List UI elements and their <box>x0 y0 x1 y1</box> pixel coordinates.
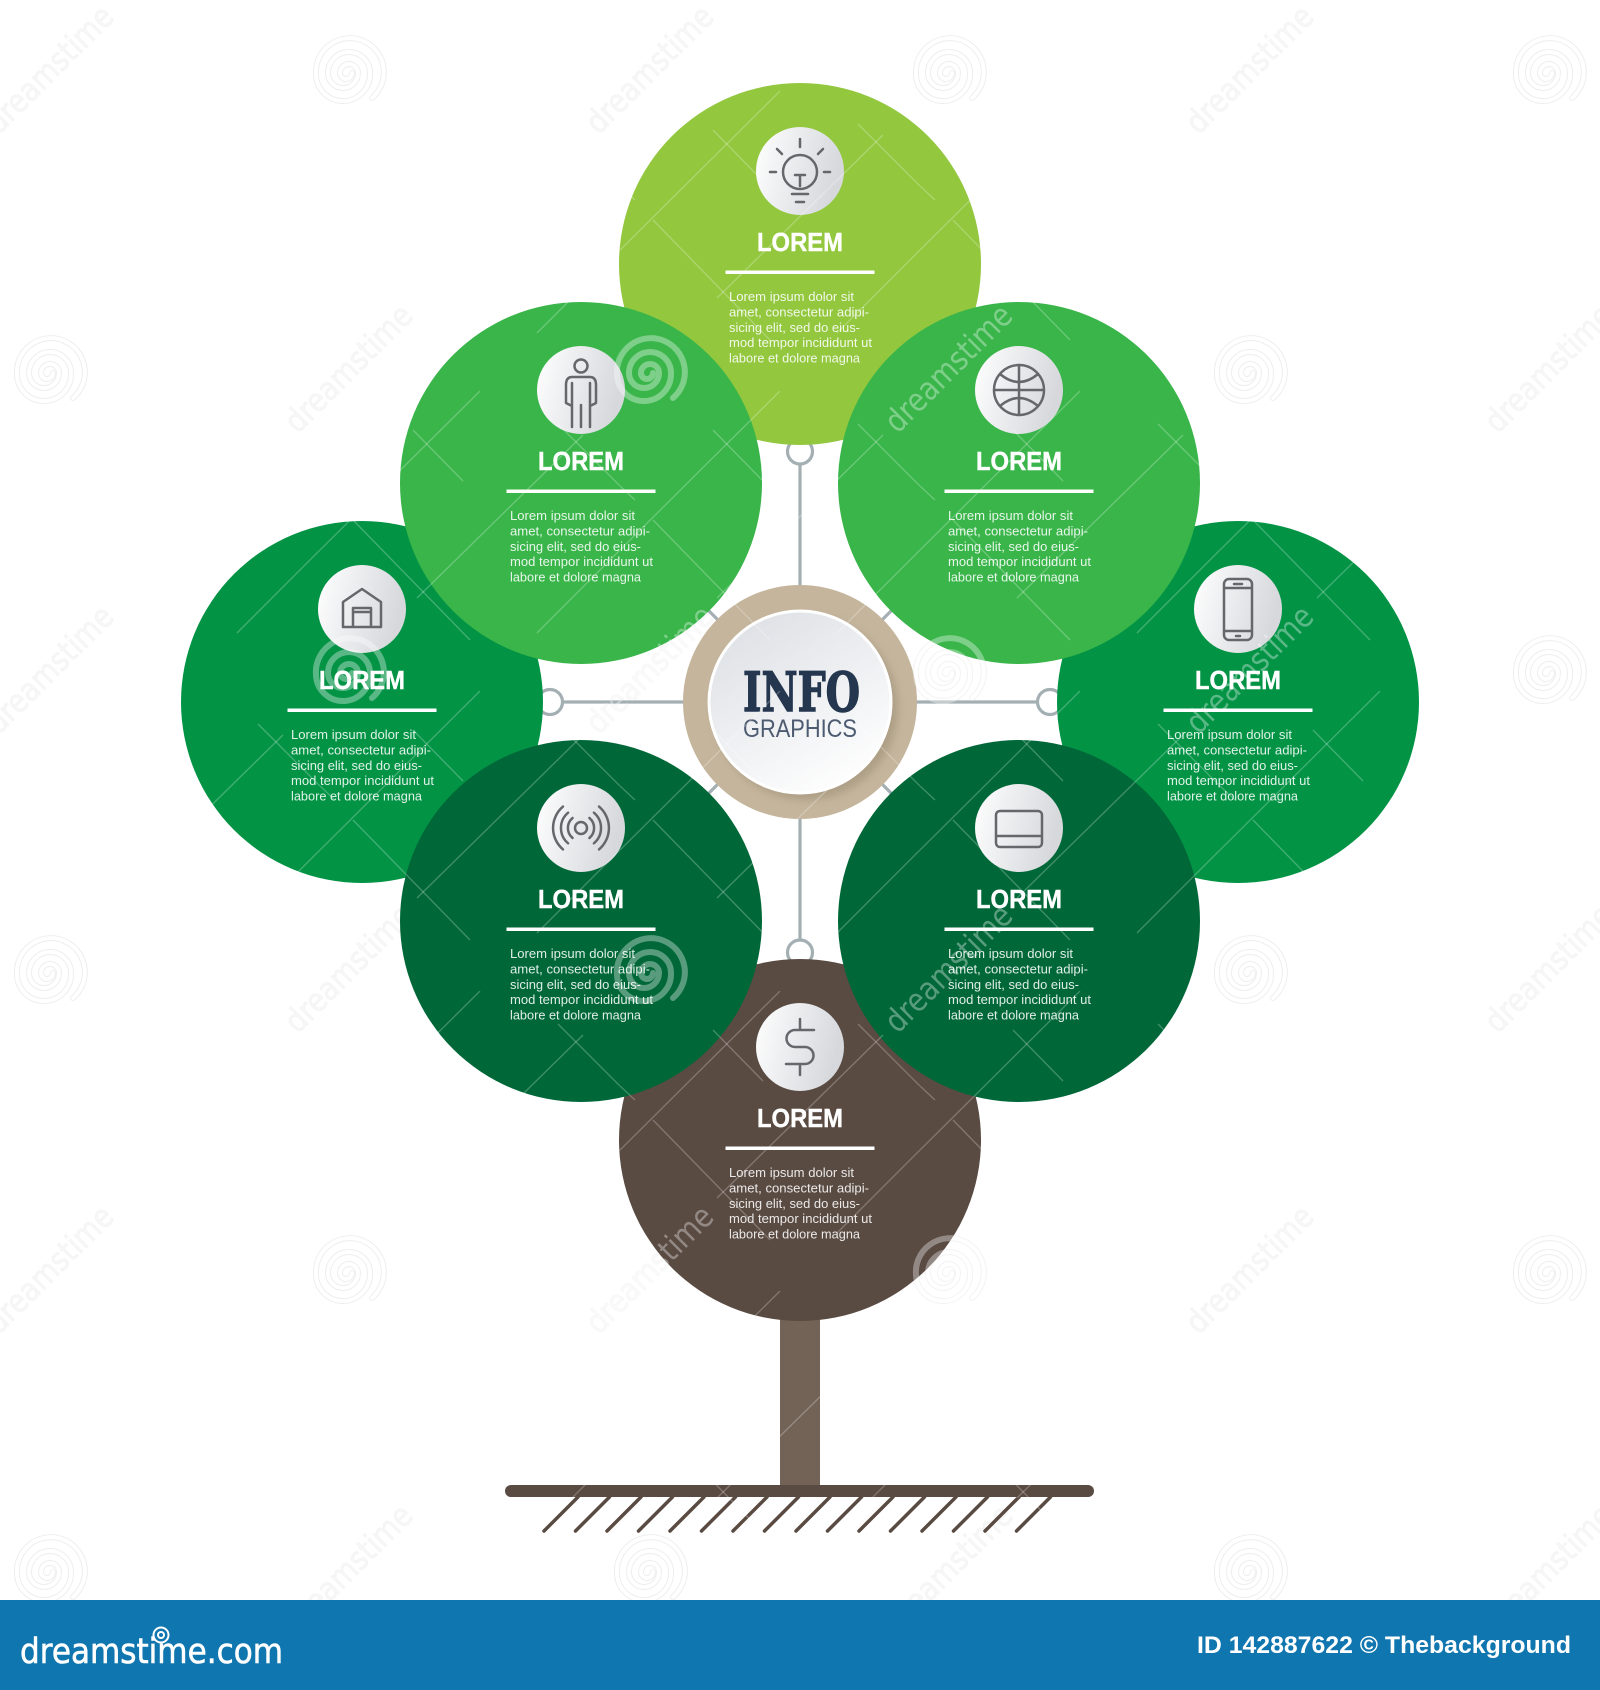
body text: sicing elit, sed do eius- <box>948 539 1079 554</box>
body text: mod tempor incididunt ut <box>510 554 653 569</box>
body text <box>1167 727 1310 804</box>
watermark: faint spirals and wordmarks on white: dreamstime <box>578 598 721 741</box>
watermark: faint spirals and wordmarks on white: dreamstime <box>277 897 420 1040</box>
body text: mod tempor incididunt ut <box>291 773 434 788</box>
panel: bottom circle, money <box>619 959 981 1321</box>
icon: smartphone <box>1194 565 1282 653</box>
body text: sicing elit, sed do eius- <box>510 539 641 554</box>
body text: Lorem ipsum dolor sit <box>510 946 635 961</box>
icon: house <box>318 565 406 653</box>
body text: amet, consectetur adipi- <box>948 524 1088 538</box>
ground line with hatching <box>505 1485 1094 1531</box>
panel: upper-right circle, basketball <box>838 302 1200 664</box>
divider <box>944 928 1094 931</box>
divider <box>506 490 656 493</box>
icon: laptop card <box>975 784 1063 872</box>
body text: labore et dolore magna <box>729 350 861 366</box>
panel: top circle, idea <box>619 83 981 445</box>
heading: LOREM <box>757 227 843 257</box>
panel: left circle, home <box>181 521 543 883</box>
watermark: faint spirals and wordmarks on white: dreamstime <box>277 1497 420 1640</box>
body text: labore et dolore magna <box>510 1008 642 1022</box>
watermark: faint spirals and wordmarks on white: dreamstime <box>578 1198 721 1341</box>
icon: basketball <box>975 346 1063 434</box>
body text: mod tempor incididunt ut <box>948 554 1091 569</box>
body text: Lorem ipsum dolor sit <box>729 1165 854 1180</box>
divider <box>288 708 436 712</box>
hub title: INFO <box>743 660 860 724</box>
tree trunk <box>780 1315 820 1490</box>
footer logo text: dreamstime.com <box>20 1632 283 1672</box>
body text <box>729 1165 872 1242</box>
body text: mod tempor incididunt ut <box>729 1211 872 1226</box>
body text <box>510 946 653 1022</box>
divider <box>726 1146 874 1150</box>
footer logo spiral <box>154 1628 168 1642</box>
panel: right circle, phone <box>1057 521 1419 883</box>
heading: LOREM <box>976 446 1062 476</box>
body text: Lorem ipsum dolor sit <box>291 727 416 742</box>
body text: amet, consectetur adipi- <box>510 962 650 976</box>
icon: dollar sign <box>756 1003 844 1091</box>
body text: amet, consectetur adipi- <box>729 1180 869 1196</box>
heading: LOREM <box>976 884 1062 914</box>
footer bar <box>0 1600 1600 1690</box>
center hub <box>683 585 917 819</box>
body text: mod tempor incididunt ut <box>510 992 653 1007</box>
divider <box>506 928 656 931</box>
body text: amet, consectetur adipi- <box>1167 742 1307 758</box>
watermark: faint spirals and wordmarks on white: dreamstime <box>877 1497 1020 1640</box>
body text: amet, consectetur adipi- <box>948 962 1088 976</box>
watermark: translucent spirals and wordmarks on the circles: dreamstime <box>578 1198 721 1341</box>
watermark: translucent spirals and wordmarks on the circles: dreamstime <box>578 598 721 741</box>
icon: person <box>537 346 625 434</box>
icon: wireless signal <box>537 784 625 872</box>
hub subtitle: GRAPHICS <box>743 715 857 743</box>
footer credit: ID 142887622 © Thebackground <box>1197 1632 1571 1659</box>
watermark: translucent spirals and wordmarks on the circles: dreamstime <box>877 897 1020 1040</box>
body text: sicing elit, sed do eius- <box>729 1196 860 1211</box>
body text: sicing elit, sed do eius- <box>510 977 641 992</box>
body text <box>948 508 1091 584</box>
body text: amet, consectetur adipi- <box>291 742 431 758</box>
heading: LOREM <box>757 1103 843 1133</box>
panel: lower-left circle, signal <box>400 740 762 1102</box>
divider <box>726 270 874 274</box>
watermark: translucent spirals and wordmarks on the circles <box>316 297 1321 1341</box>
body text <box>948 946 1091 1022</box>
connector lines and end rings <box>538 439 1062 965</box>
body text: Lorem ipsum dolor sit <box>948 508 1073 523</box>
body text: mod tempor incididunt ut <box>729 335 872 350</box>
body text: sicing elit, sed do eius- <box>729 320 860 335</box>
divider <box>1164 708 1312 712</box>
body text <box>510 508 653 584</box>
body text: labore et dolore magna <box>948 1008 1080 1022</box>
body text: mod tempor incididunt ut <box>1167 773 1310 788</box>
body text: sicing elit, sed do eius- <box>1167 758 1298 773</box>
heading: LOREM <box>319 665 405 695</box>
body text: labore et dolore magna <box>1167 788 1299 804</box>
heading: LOREM <box>1195 665 1281 695</box>
body text: labore et dolore magna <box>729 1226 861 1242</box>
body text: labore et dolore magna <box>510 570 642 584</box>
icon: light bulb <box>756 127 844 215</box>
body text: Lorem ipsum dolor sit <box>729 289 854 304</box>
panel: upper-left circle, person <box>400 302 762 664</box>
heading: LOREM <box>538 884 624 914</box>
body text: amet, consectetur adipi- <box>729 304 869 320</box>
body text: sicing elit, sed do eius- <box>291 758 422 773</box>
watermark: translucent spirals and wordmarks on the circles: dreamstime <box>1178 598 1321 741</box>
watermark: translucent spirals and wordmarks on the circles: dreamstime <box>877 297 1020 440</box>
watermark: faint spirals and wordmarks on white: dreamstime <box>277 297 420 440</box>
body text <box>729 289 872 366</box>
body text: labore et dolore magna <box>291 788 423 804</box>
body text: mod tempor incididunt ut <box>948 992 1091 1007</box>
body text: sicing elit, sed do eius- <box>948 977 1079 992</box>
body text: Lorem ipsum dolor sit <box>1167 727 1292 742</box>
body text: Lorem ipsum dolor sit <box>948 946 1073 961</box>
panel: lower-right circle, device <box>838 740 1200 1102</box>
body text: Lorem ipsum dolor sit <box>510 508 635 523</box>
divider <box>944 490 1094 493</box>
body text: amet, consectetur adipi- <box>510 524 650 538</box>
watermark: faint spirals and wordmarks on white: dreamstime <box>1178 1198 1321 1341</box>
heading: LOREM <box>538 446 624 476</box>
body text: labore et dolore magna <box>948 570 1080 584</box>
body text <box>291 727 434 804</box>
